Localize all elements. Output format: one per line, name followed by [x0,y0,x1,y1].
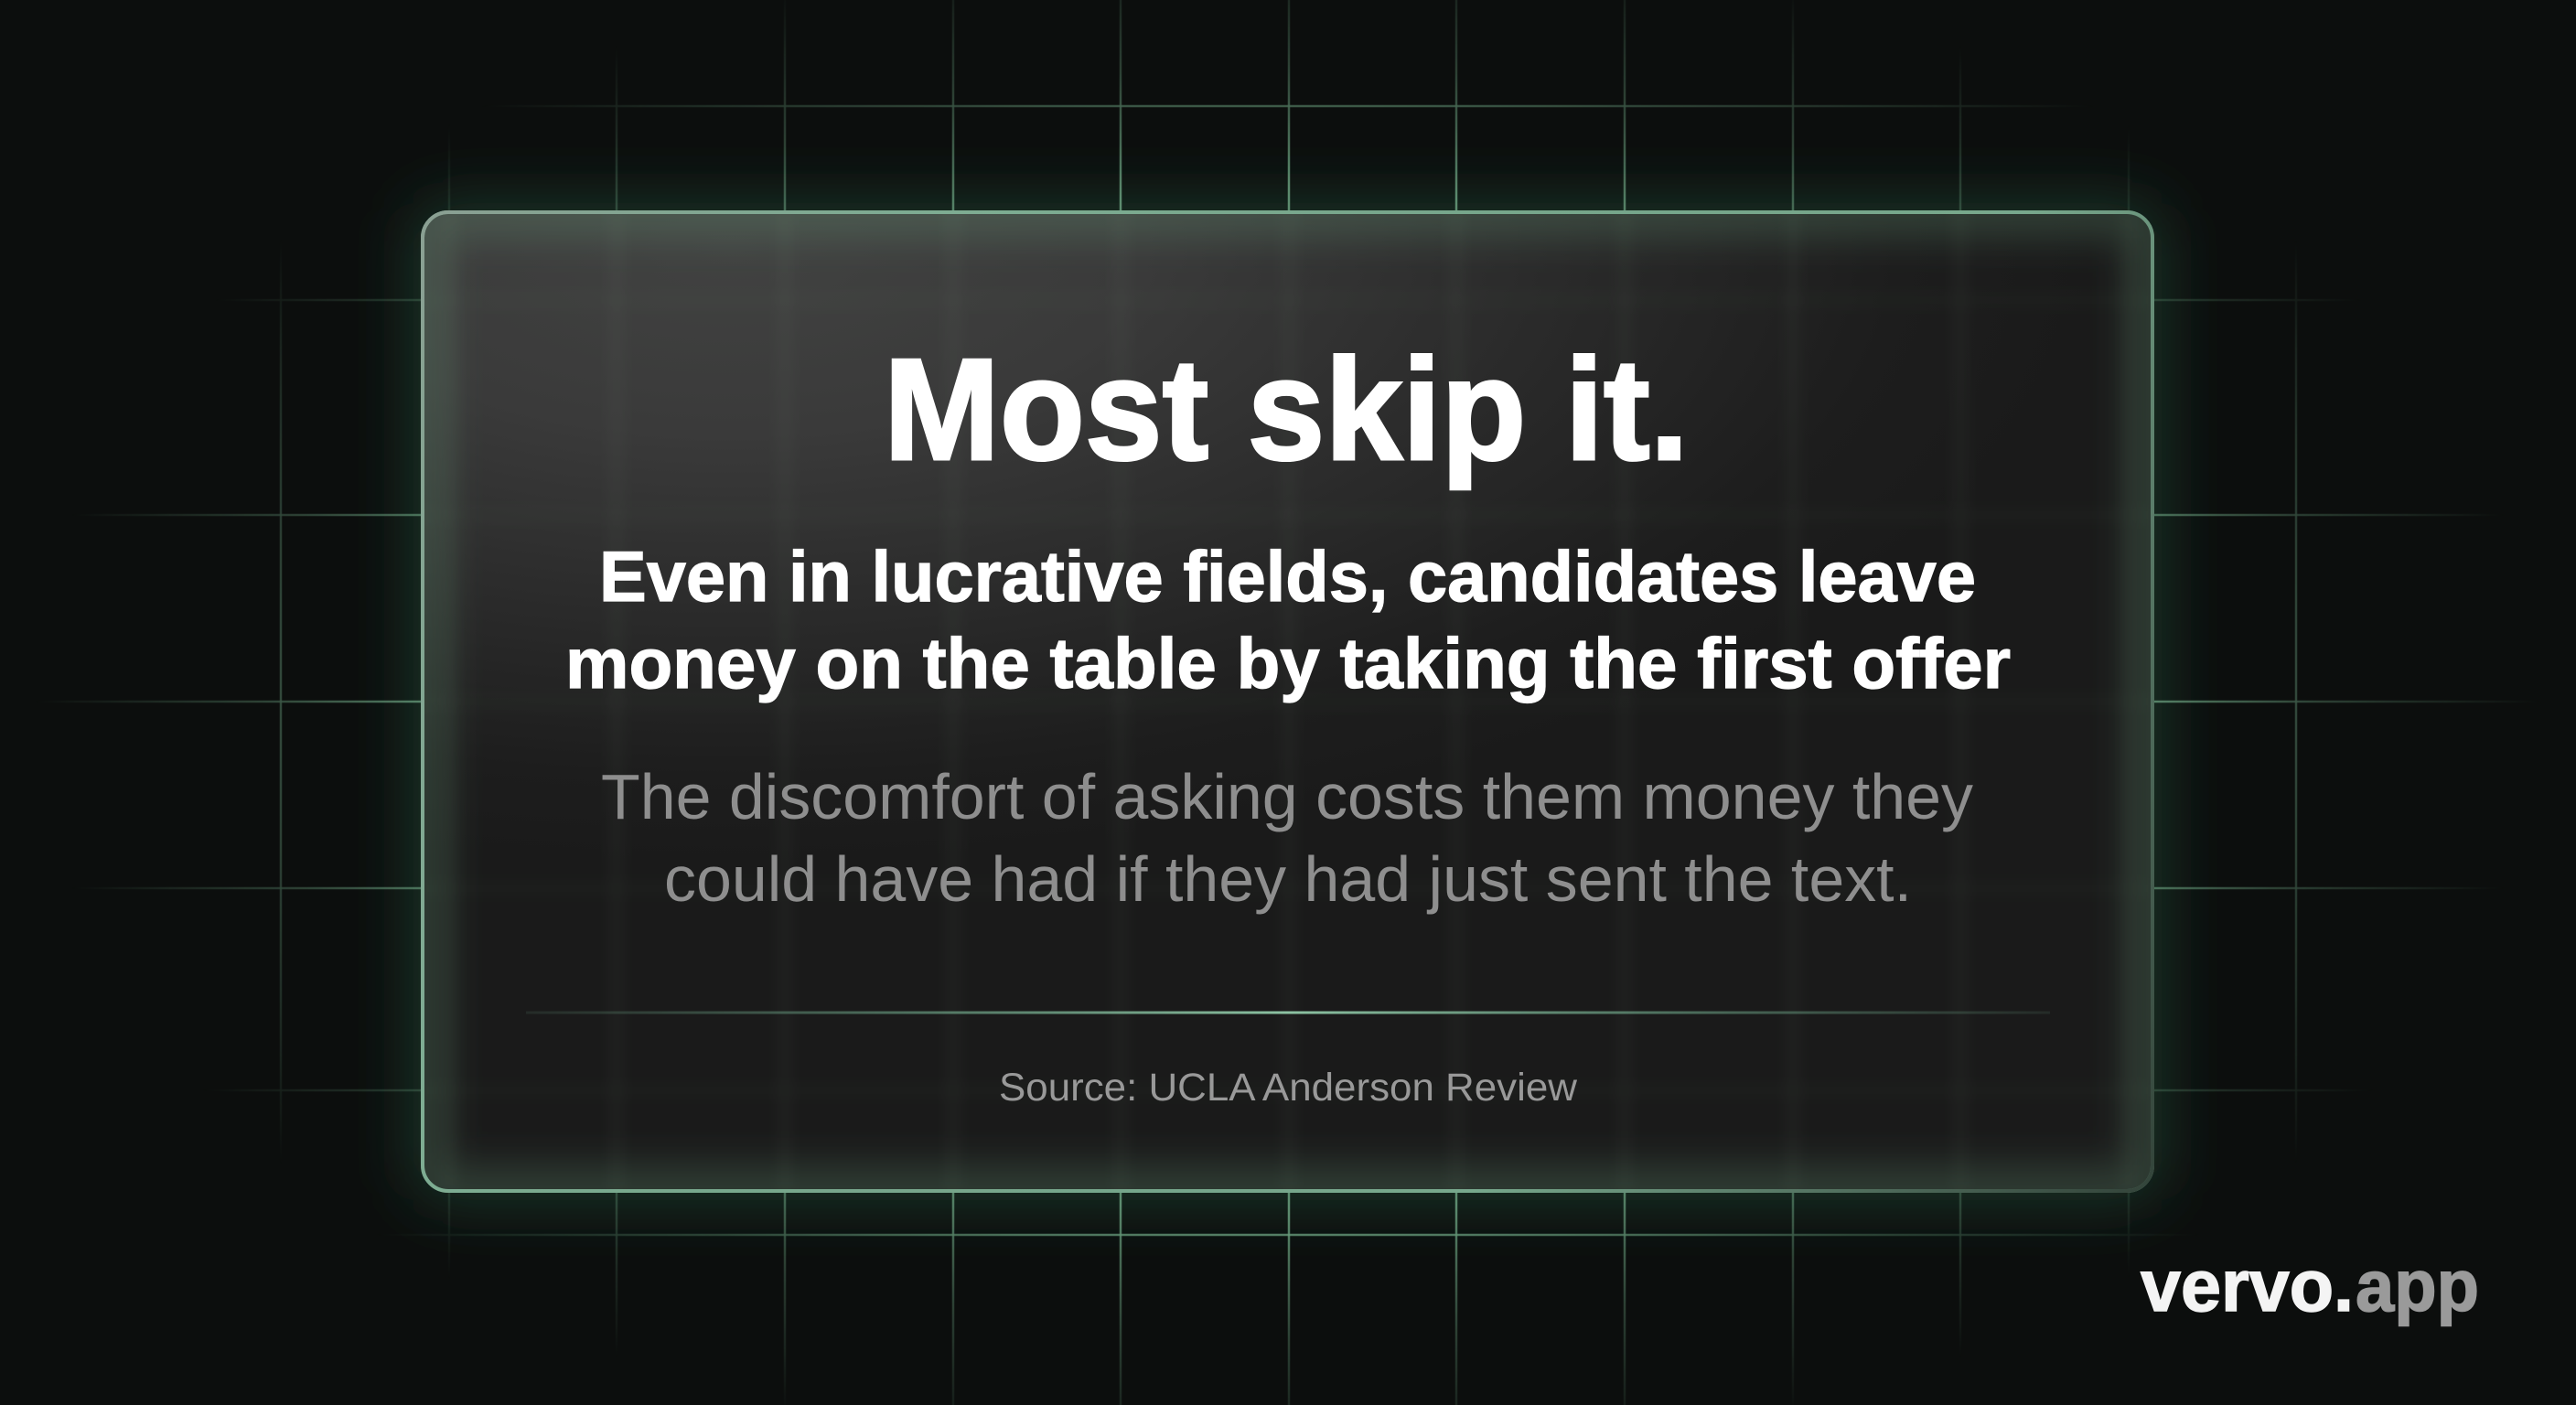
source: Source: UCLA Anderson Review [999,1066,1578,1110]
subheading [565,536,2011,703]
body text [601,761,1973,915]
subheading: Even in lucrative fields, candidates leave [599,536,1976,617]
logo: vervo.app: vervo. [2141,1245,2354,1326]
subheading: money on the table by taking the first offer [565,623,2011,703]
divider [526,1012,2050,1014]
title: Most skip it. [884,329,1689,490]
logo: vervo.app [2141,1245,2479,1326]
body text: The discomfort of asking costs them money they [601,761,1973,832]
card glow [413,203,2162,1200]
panel: glass card [421,210,2154,1193]
body text: could have had if they had just sent the text. [664,843,1912,915]
logo: vervo.app: app [2356,1245,2479,1326]
